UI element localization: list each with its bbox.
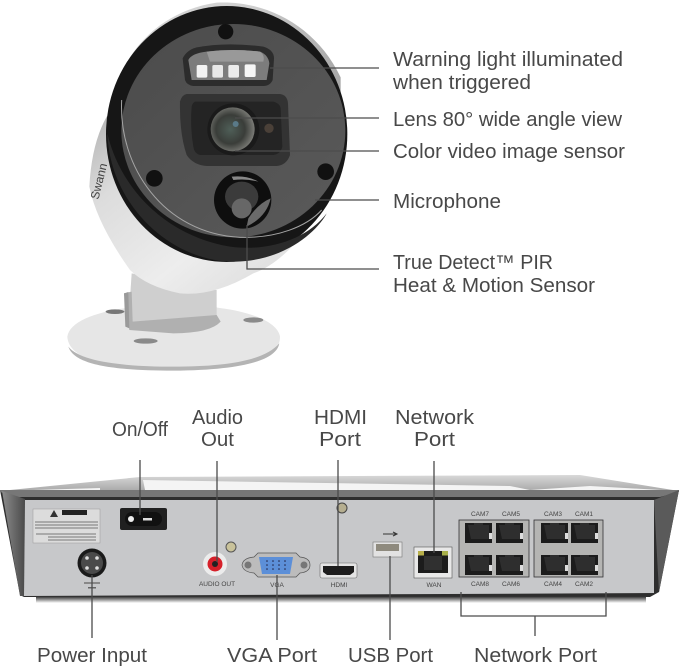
- power input: [78, 548, 106, 588]
- network ports group 1: [459, 520, 529, 577]
- label: USB port: USB Port: [348, 645, 433, 667]
- label: warning light: Warning light illuminated: [393, 49, 623, 71]
- left wedge: [2, 491, 25, 596]
- camera port labels: CAM4: [544, 581, 562, 588]
- VGA port: VGA: [270, 582, 285, 589]
- label: microphone: Microphone: [393, 191, 501, 213]
- bottom shadow: [36, 596, 646, 603]
- audio out: [199, 542, 236, 588]
- lens housing: [180, 94, 290, 166]
- face plate: [121, 24, 345, 237]
- camera hood: [113, 2, 341, 100]
- warning light: [183, 44, 274, 86]
- camera port labels: CAM5: [502, 511, 520, 518]
- image sensor dot: [264, 124, 274, 133]
- camera port labels: CAM8: [471, 581, 489, 588]
- camera port labels: CAM7: [471, 511, 489, 518]
- brand logo: Swann: [88, 162, 110, 201]
- audio out: AUDIO OUT: [199, 581, 235, 588]
- camera port labels: CAM2: [575, 581, 593, 588]
- NVR recorder: [0, 475, 679, 603]
- camera neck bracket: [124, 273, 221, 333]
- camera body: [89, 97, 343, 294]
- silver back panel: [24, 500, 654, 596]
- label: VGA port: VGA Port: [227, 645, 317, 667]
- face rim highlight: [121, 100, 322, 237]
- label: lens: Lens 80° wide angle view: [393, 109, 623, 131]
- camera port labels: CAM1: [575, 511, 593, 518]
- camera port labels: CAM6: [502, 581, 520, 588]
- label: HDMI port: Port: [319, 429, 361, 451]
- label: PIR sensor line 2: Heat & Motion Sensor: [393, 275, 595, 297]
- power switch: [120, 508, 167, 530]
- lower rim: [107, 133, 327, 262]
- camera mount base: [67, 305, 280, 371]
- leader lines: camera: [235, 68, 379, 269]
- camera: [67, 2, 347, 371]
- label: HDMI port: [314, 407, 367, 451]
- lens: [207, 103, 259, 155]
- screw holes: [146, 24, 334, 187]
- top highlights: [0, 480, 679, 491]
- label: HDMI port: HDMI: [314, 407, 367, 429]
- network ports group 2: [534, 520, 603, 577]
- caution label: [33, 509, 100, 543]
- WAN port: [414, 547, 452, 589]
- label: network port bottom: Network Port: [474, 645, 597, 667]
- label: audio out: Out: [201, 429, 234, 451]
- label: image sensor: Color video image sensor: [393, 141, 625, 163]
- HDMI port: [320, 503, 357, 589]
- label: warning light line 2: when triggered: [392, 72, 531, 94]
- label: network port top: [395, 407, 475, 451]
- front bezel: [0, 490, 679, 597]
- camera port labels: CAM3: [544, 511, 562, 518]
- HDMI port: HDMI: [331, 582, 347, 589]
- camera port labels: [471, 511, 593, 588]
- USB port: [373, 532, 402, 557]
- black bezel ring: [106, 6, 347, 262]
- leader lines: recorder: [92, 460, 606, 640]
- label: audio out: Audio: [192, 407, 243, 429]
- label: audio out: [192, 407, 243, 451]
- PIR sensor: [214, 171, 271, 229]
- label: PIR sensor: True Detect™ PIR: [393, 252, 553, 274]
- label: network port top: Network: [395, 407, 475, 429]
- label: power input: Power Input: [37, 645, 147, 667]
- label: on/off: On/Off: [112, 419, 168, 441]
- top surface: [0, 475, 679, 491]
- right wedge: [654, 490, 679, 592]
- VGA port: [242, 553, 310, 589]
- label: network port top: Port: [414, 429, 455, 451]
- WAN port: WAN: [427, 582, 442, 589]
